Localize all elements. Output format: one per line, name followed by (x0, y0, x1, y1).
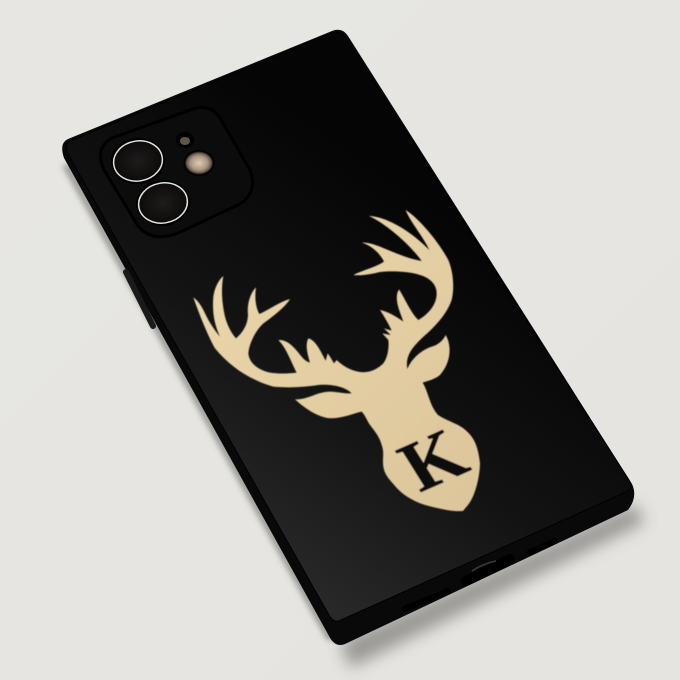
camera island (100, 107, 252, 237)
case back face (66, 32, 631, 621)
camera module (100, 107, 252, 237)
monogram letter K: K (385, 414, 482, 507)
deer silhouette (193, 210, 480, 511)
deer head monogram (193, 210, 482, 511)
phone case (62, 30, 634, 645)
speaker port right (530, 541, 555, 552)
lower lens (135, 179, 191, 227)
charging port (466, 559, 510, 581)
case body edge (62, 30, 634, 645)
flash (184, 150, 214, 176)
microphone dot (176, 132, 194, 148)
side button (126, 272, 153, 326)
speaker port left (404, 591, 448, 609)
phone shadow (62, 165, 645, 668)
upper lens (110, 137, 166, 185)
